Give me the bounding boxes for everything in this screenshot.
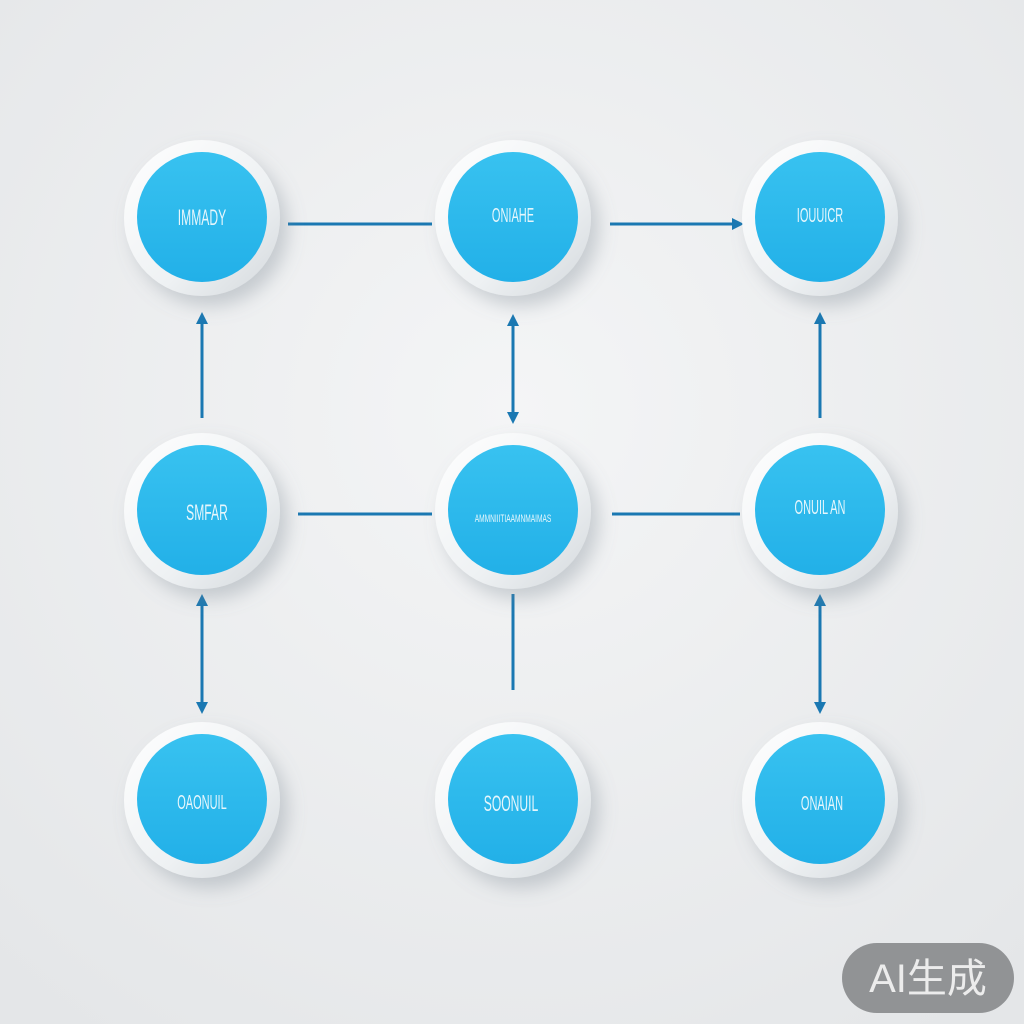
node 1 — [124, 140, 280, 296]
node 4 — [124, 433, 280, 589]
node 2: ONIAHE — [492, 205, 534, 227]
badge: AI生成 — [842, 943, 1014, 1013]
node 5 — [435, 433, 591, 589]
arrow: row2 left — [298, 512, 432, 516]
node 2 — [435, 140, 591, 296]
node 5: AMMNIIITIAAMNMAIMAS — [475, 512, 551, 524]
arrow: col3 lower — [818, 600, 822, 708]
node 7 — [124, 722, 280, 878]
node 1: IMMADY — [178, 205, 226, 230]
badge: AI生成: AI生成 — [869, 957, 987, 1001]
node 9: ONAIAN — [801, 793, 843, 815]
arrow: row1 left — [288, 222, 432, 226]
node 3 — [742, 140, 898, 296]
node 8: SOONUIL — [484, 791, 538, 816]
node 4: SMFAR — [186, 500, 228, 525]
arrow: col2 upper — [512, 320, 514, 418]
arrow: col3 upper — [818, 318, 822, 418]
arrow: col2 lower — [512, 594, 514, 690]
node 7: OAONUIL — [177, 792, 227, 814]
node 6: ONUIL AN — [795, 497, 845, 519]
connectors — [202, 224, 820, 708]
arrow: row2 right — [612, 512, 740, 516]
node 8 — [435, 722, 591, 878]
arrow: col1 lower — [200, 600, 204, 708]
arrow: row1 right — [610, 222, 738, 226]
node 3: IOUUICR — [797, 205, 843, 227]
arrow: col1 upper — [200, 318, 204, 418]
node 9 — [742, 722, 898, 878]
node 6 — [742, 433, 898, 589]
